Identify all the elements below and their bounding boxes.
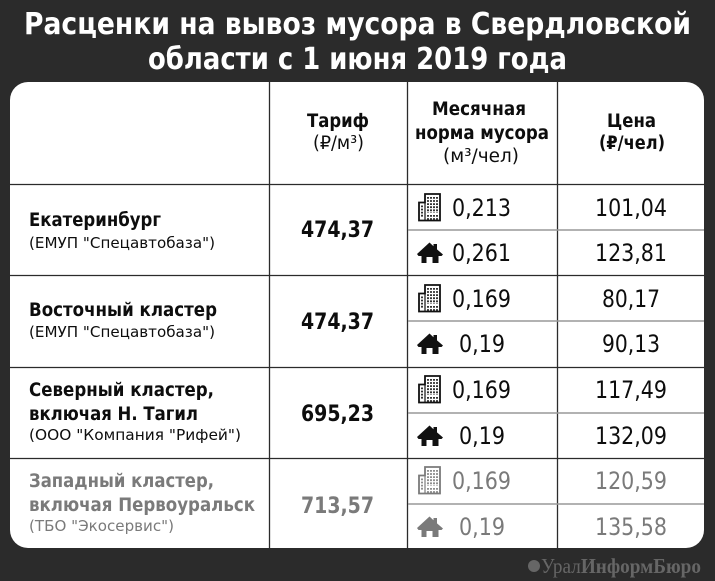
row: Eastern cluster: 0,19 <box>459 330 505 358</box>
icon: house <box>417 516 443 537</box>
row: Eastern cluster: 0,169 <box>452 285 511 313</box>
column header: price <box>599 111 665 154</box>
row: Western cluster (greyed): 0,169 <box>452 467 511 495</box>
row: Yekaterinburg: 474,37 <box>301 217 374 243</box>
row: Yekaterinburg <box>29 194 667 267</box>
icon: house <box>417 242 443 263</box>
title <box>24 7 691 77</box>
row: Western cluster (greyed): 120,59 <box>595 467 667 495</box>
row: Yekaterinburg: 101,04 <box>595 194 667 222</box>
column header: monthly norm: (м³/чел) <box>443 146 519 167</box>
column header: price: Цена <box>607 111 656 132</box>
column header: monthly norm: Месячная <box>432 99 526 120</box>
column header: price: (₽/чел) <box>599 133 665 154</box>
row: Northern cluster: (ООО "Компания "Рифей") <box>29 426 241 444</box>
row: Yekaterinburg: 123,81 <box>595 239 667 267</box>
icon: apartment building <box>419 376 440 402</box>
row: Eastern cluster: 474,37 <box>301 309 374 335</box>
column header: tariff: Тариф <box>307 111 369 132</box>
row: Western cluster (greyed): 135,58 <box>595 513 667 541</box>
row: Yekaterinburg: Екатеринбург <box>29 210 161 231</box>
row: Eastern cluster: (ЕМУП "Спецавтобаза") <box>29 323 215 341</box>
row: Western cluster (greyed): включая Первоуральск <box>29 495 255 516</box>
icon: apartment building <box>419 467 440 494</box>
row: Northern cluster: 117,49 <box>595 376 667 404</box>
row: Western cluster (greyed): Западный кластер, <box>29 471 214 492</box>
row: Western cluster (greyed): 713,57 <box>301 493 374 519</box>
title: области с 1 июня 2019 года <box>148 42 567 77</box>
row: Northern cluster: 695,23 <box>301 401 374 427</box>
row: Eastern cluster: Восточный кластер <box>29 300 217 321</box>
column header: monthly norm: норма мусора <box>415 123 549 144</box>
table panel <box>10 82 704 548</box>
icon: house <box>417 426 443 446</box>
column header: tariff: (₽/м³) <box>313 133 364 154</box>
row: Northern cluster: 0,19 <box>459 422 505 450</box>
row: Eastern cluster: 90,13 <box>602 330 660 358</box>
watermark: УралИнформБюро <box>541 554 701 578</box>
row: Northern cluster: включая Н. Тагил <box>29 404 198 425</box>
row: Northern cluster: 0,169 <box>452 376 511 404</box>
icon: apartment building <box>419 285 440 312</box>
icon: apartment building <box>419 194 440 220</box>
icon: house <box>417 334 443 354</box>
row: Western cluster (greyed): (ТБО "Экосервис") <box>29 517 174 535</box>
row: Yekaterinburg: (ЕМУП "Спецавтобаза") <box>29 234 215 252</box>
row: Western cluster (greyed) <box>29 467 667 541</box>
row: Eastern cluster <box>29 285 660 358</box>
row: Northern cluster: Северный кластер, <box>29 380 214 401</box>
row: Yekaterinburg: 0,213 <box>452 194 511 222</box>
row: Western cluster (greyed): 0,19 <box>459 513 505 541</box>
column header: monthly norm <box>415 99 549 167</box>
row: Yekaterinburg: 0,261 <box>452 239 511 267</box>
row: Northern cluster: 132,09 <box>595 422 667 450</box>
row: Eastern cluster: 80,17 <box>602 285 660 313</box>
row: Northern cluster <box>29 376 667 450</box>
column header: tariff <box>307 111 369 154</box>
